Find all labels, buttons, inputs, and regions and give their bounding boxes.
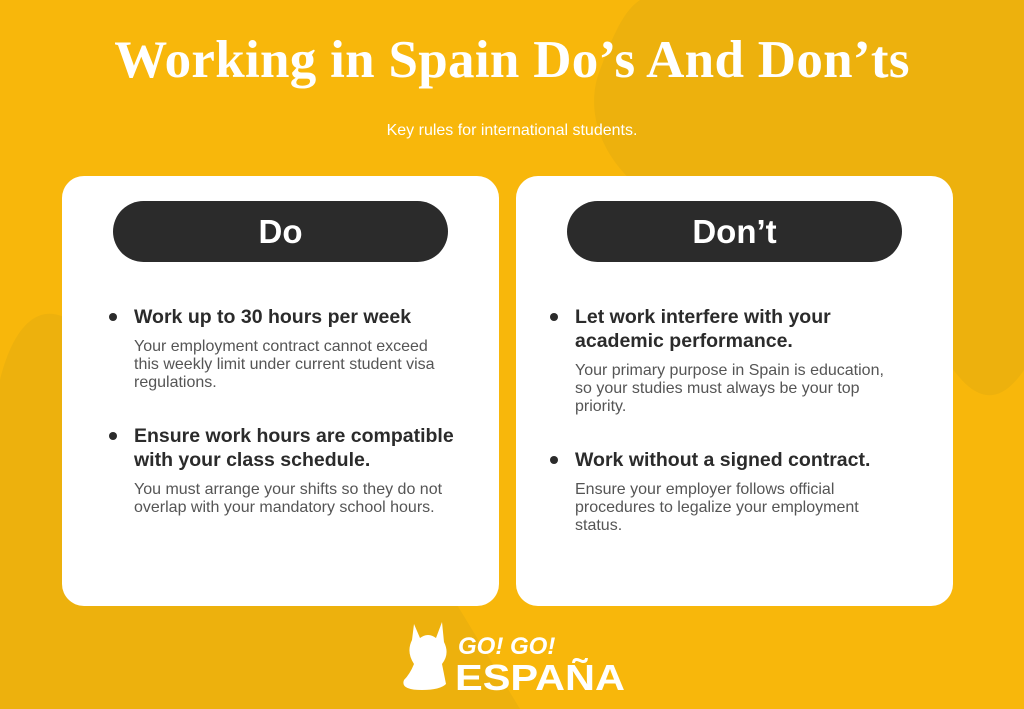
item: hours: Work up to 30 hours per week	[134, 306, 411, 328]
pill heading: Do: Do	[258, 213, 302, 250]
item: academics: academic performance.	[575, 330, 793, 352]
pill heading: Don't	[567, 201, 902, 262]
item: hours	[109, 306, 435, 391]
item: academics: so your studies must always be your top	[575, 380, 860, 397]
item: academics	[550, 306, 884, 415]
item: academics: priority.	[575, 398, 626, 415]
item: academics: Let work interfere with your	[575, 306, 831, 328]
pill heading: Do	[113, 201, 448, 262]
item: schedule: overlap with your mandatory school hours.	[134, 499, 435, 516]
item: schedule: You must arrange your shifts so they do not	[134, 481, 442, 498]
item: hours: this weekly limit under current student visa	[134, 356, 435, 373]
item: hours: Your employment contract cannot exceed	[134, 338, 428, 355]
pill heading: Don't: Don’t	[692, 213, 777, 250]
panel: don't	[516, 176, 953, 606]
wordmark: GO! GO!	[458, 633, 555, 660]
wordmark	[455, 633, 625, 698]
item: contract: status.	[575, 517, 622, 534]
panel: do	[62, 176, 499, 606]
logo	[403, 622, 625, 693]
item: contract	[550, 449, 870, 534]
item: contract: Ensure your employer follows official	[575, 481, 834, 498]
item: schedule	[109, 425, 454, 516]
item: schedule: with your class schedule.	[134, 449, 370, 471]
subtitle: Key rules for international students.	[387, 122, 637, 139]
title: Working in Spain Do’s And Don’ts	[114, 31, 910, 89]
item: contract: Work without a signed contract.	[575, 449, 870, 471]
item: contract: procedures to legalize your employment	[575, 499, 859, 516]
icon: lynx	[403, 622, 447, 690]
item: academics: Your primary purpose in Spain is education,	[575, 362, 884, 379]
item: schedule: Ensure work hours are compatible	[134, 425, 454, 447]
item: hours: regulations.	[134, 374, 217, 391]
